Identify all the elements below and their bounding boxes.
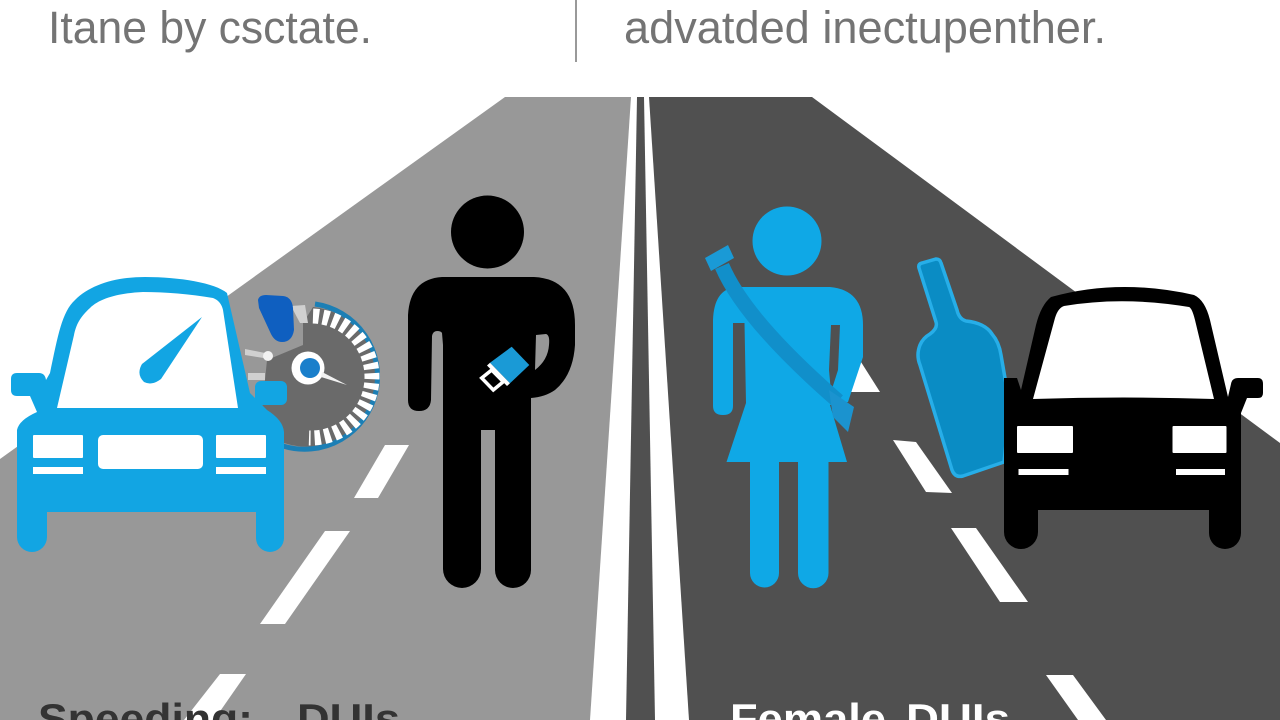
icon: seat belt buckle — [482, 347, 529, 390]
label: female DUIs — [730, 695, 1010, 720]
icon: bottle — [918, 259, 1010, 476]
heading: left: Itane by csctate. — [48, 2, 372, 53]
heading: right: advatded inectupenther. — [624, 2, 1106, 53]
lane dashes: left road — [184, 445, 409, 720]
seat belt sash — [722, 266, 838, 401]
right road — [649, 97, 1280, 720]
windshield — [1033, 301, 1214, 399]
icon: blue car — [11, 277, 287, 552]
centre median — [626, 97, 655, 720]
icon: black car — [1004, 287, 1263, 549]
headlights and grille — [33, 435, 266, 474]
lane dashes: right road — [851, 362, 1106, 720]
icon: female figure — [705, 206, 863, 588]
headlights — [1017, 426, 1226, 475]
speed needle — [139, 317, 202, 383]
icon: speedometer gauge — [245, 295, 378, 449]
windshield — [57, 292, 238, 408]
icon: male figure — [408, 196, 575, 588]
label: speeding and DUIs — [38, 695, 400, 720]
left road — [0, 97, 631, 720]
